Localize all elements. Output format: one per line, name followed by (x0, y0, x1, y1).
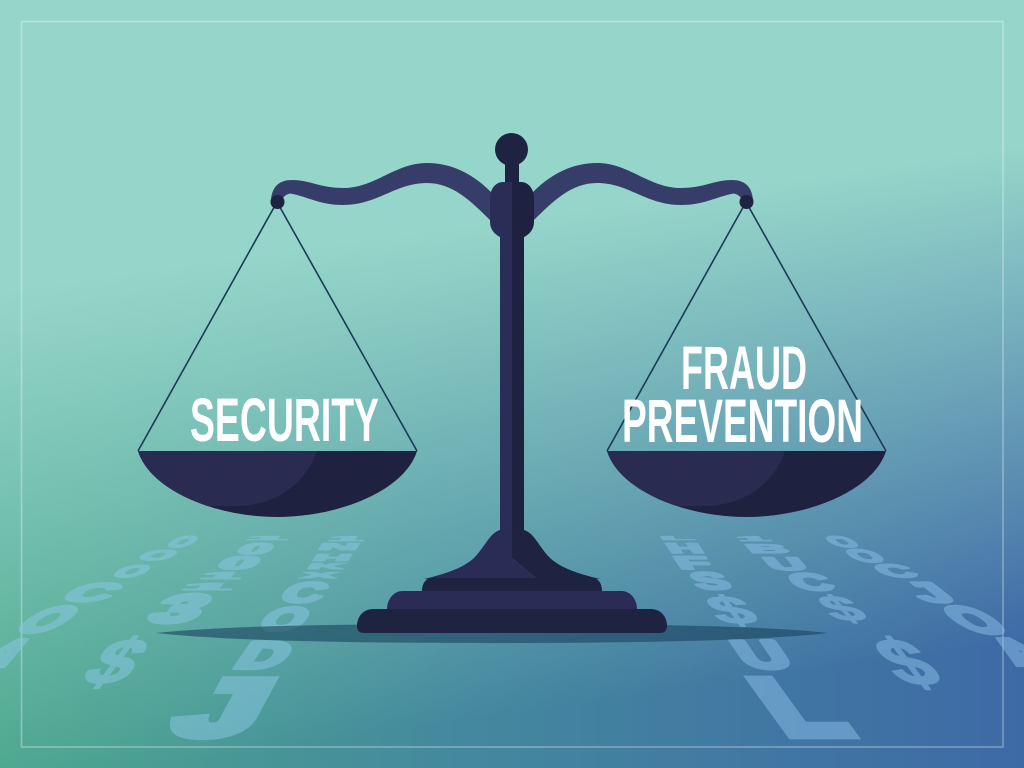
center post (500, 230, 524, 535)
perspective characters: right columns: C (781, 569, 842, 595)
perspective characters: right columns: U (723, 633, 801, 677)
perspective characters: right columns: S (684, 568, 737, 594)
perspective characters: left columns (0, 533, 367, 752)
perspective characters: left columns: 1 (197, 570, 247, 581)
perspective characters: left columns: O (105, 562, 158, 581)
left pan (130, 451, 417, 517)
perspective characters: right columns: L (732, 663, 868, 752)
knob (495, 133, 528, 166)
perspective characters: right columns: $ (858, 627, 957, 699)
neck (505, 160, 519, 188)
base bell (424, 530, 600, 579)
left beam arm (271, 163, 491, 221)
hub (490, 182, 534, 238)
right pan (599, 451, 886, 517)
perspective characters: right columns: C (866, 561, 926, 581)
balance scale (130, 133, 886, 633)
perspective characters: left columns: 1 (179, 581, 237, 592)
perspective characters: right columns: J (894, 577, 967, 608)
perspective characters: left columns: O (252, 601, 319, 637)
perspective characters: left columns: 1 (244, 535, 291, 541)
perspective characters: right columns: F (669, 553, 717, 573)
perspective characters: left columns: J (159, 663, 289, 752)
perspective characters: right columns: O (818, 533, 867, 551)
perspective characters: left columns: D (226, 635, 302, 677)
perspective characters: left columns: X (298, 571, 341, 580)
perspective characters: right columns: H (662, 540, 707, 556)
perspective characters: left columns: H (310, 552, 355, 563)
right beam arm (533, 163, 753, 221)
right strings (607, 202, 886, 451)
perspective characters: left columns: K (305, 561, 348, 571)
label: fraud prevention (622, 334, 863, 455)
perspective characters: left columns: $ (68, 626, 165, 697)
perspective characters: right columns: O (838, 546, 894, 566)
perspective characters: left columns: N (315, 541, 362, 552)
ground shadow (156, 624, 828, 643)
perspective characters: right columns: O (927, 600, 1023, 641)
perspective characters: left columns: O (131, 548, 184, 563)
perspective characters: left columns: C (274, 577, 336, 608)
perspective characters: left columns: 3 (137, 587, 224, 630)
perspective characters: right columns (658, 533, 1024, 752)
perspective characters: right columns: 1 (734, 535, 772, 543)
perspective characters: left columns: 0 (212, 553, 267, 573)
perspective characters: right columns: U (758, 554, 813, 574)
left pivot (270, 195, 284, 209)
perspective characters: left columns: 0 (232, 541, 279, 558)
label: fraud prevention: FRAUD (681, 334, 807, 402)
perspective characters: left columns: O (160, 533, 206, 550)
perspective characters: left columns: O (1, 599, 95, 640)
right pivot (740, 195, 754, 209)
left strings (138, 202, 417, 451)
base steps (357, 578, 667, 633)
perspective characters: right columns: B (741, 542, 793, 556)
label: fraud prevention: PREVENTION (622, 387, 863, 455)
perspective characters: left columns: C (51, 579, 133, 607)
perspective characters: right columns: L (658, 535, 696, 541)
perspective characters: right columns: $ (696, 589, 767, 632)
label: security: SECURITY (190, 386, 379, 454)
perspective characters: right columns: $ (806, 589, 877, 628)
perspective characters: left columns: 1 (327, 535, 367, 543)
